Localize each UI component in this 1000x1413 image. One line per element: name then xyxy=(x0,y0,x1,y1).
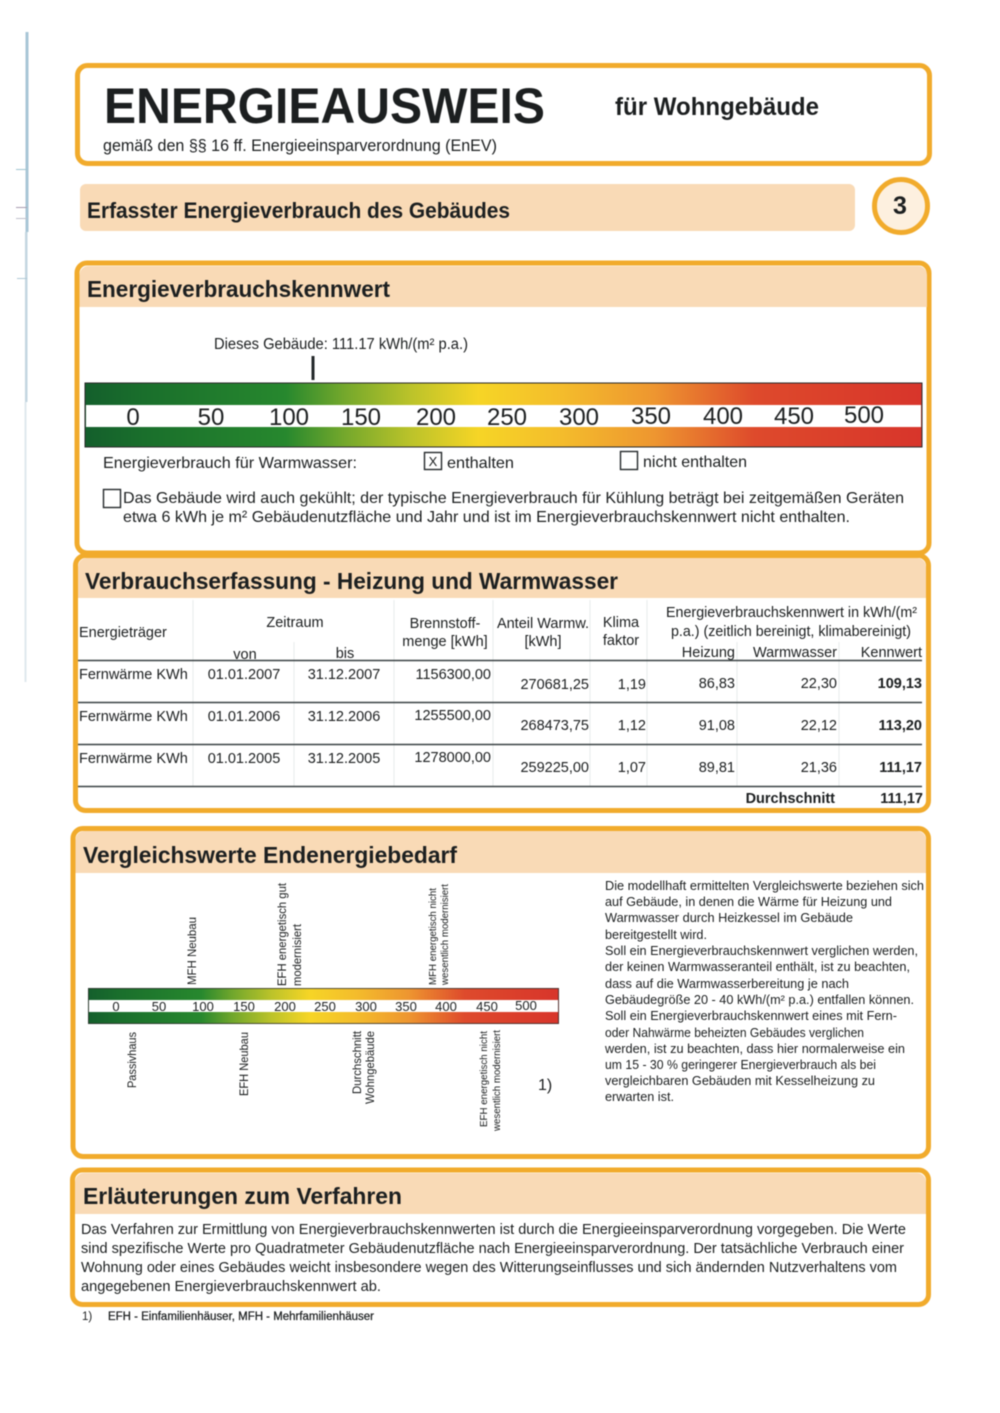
row 2007: 31.12.2007 xyxy=(308,667,380,683)
table header: Warmwasser xyxy=(753,645,837,661)
comparison explanation: Warmwasser durch Heizkessel im Gebäude xyxy=(605,910,853,925)
heading: Energieverbrauchskennwert xyxy=(87,276,390,302)
label: Durchschnitt Wohngebäude xyxy=(350,1030,377,1104)
panel: Energieverbrauchskennwert xyxy=(77,263,929,553)
energy scale: 300 xyxy=(559,404,599,431)
row 2005: 01.01.2005 xyxy=(208,751,280,767)
label: MFH Neubau: MFH Neubau xyxy=(185,917,199,985)
row 2007 xyxy=(79,667,922,693)
row 2006: 01.01.2006 xyxy=(208,709,280,725)
label: EFH nicht modernisiert xyxy=(478,1030,503,1132)
page number badge: 3 xyxy=(893,192,907,220)
heading: Verbrauchserfassung - Heizung und Warmwasser xyxy=(85,568,618,594)
table header: Heizung xyxy=(682,645,735,661)
energy scale: 500 xyxy=(844,402,884,429)
comparison scale: 300 xyxy=(355,999,377,1014)
table header: Klima xyxy=(603,615,640,631)
cooling note xyxy=(104,490,904,526)
comparison scale: 250 xyxy=(314,999,336,1014)
label: Passivhaus: Passivhaus xyxy=(125,1032,139,1088)
energy scale: 350 xyxy=(631,403,671,430)
table header: von xyxy=(233,647,257,663)
row 2005: 1278000,00 xyxy=(414,750,491,766)
label: EFH Neubau: EFH Neubau xyxy=(237,1032,251,1096)
panel: Erläuterungen xyxy=(72,1170,928,1304)
label: MFH nicht modernisiert: MFH energetisch nicht xyxy=(427,888,439,985)
comparison explanation: um 15 - 30 % geringerer Energieverbrauch als bei xyxy=(605,1057,876,1072)
table rules xyxy=(78,660,922,786)
section banner xyxy=(80,184,855,231)
section banner: Erfasster Energieverbrauch des Gebäudes xyxy=(87,198,510,223)
comparison explanation: erwarten ist. xyxy=(605,1089,674,1104)
row 2007: 86,83 xyxy=(699,676,735,692)
table header: Energieträger xyxy=(79,625,167,641)
row 2006: 1255500,00 xyxy=(414,708,491,724)
checkbox: enthalten: X xyxy=(429,454,438,469)
row 2005: 89,81 xyxy=(699,760,735,776)
comparison scale: 0 xyxy=(112,999,120,1014)
energy scale: 0 xyxy=(126,404,140,431)
row 2006: 22,12 xyxy=(801,718,837,734)
footnote: 1) xyxy=(82,1311,92,1323)
average row: Durchschnitt xyxy=(746,791,835,807)
table header: [kWh] xyxy=(524,634,562,650)
heading: Vergleichswerte Endenergiebedarf xyxy=(83,842,457,868)
row 2006: 91,08 xyxy=(699,718,735,734)
checkbox: enthalten xyxy=(424,452,514,472)
comparison explanation: vergleichbaren Gebäuden mit Kesselheizung zu xyxy=(605,1073,875,1088)
table header: bis xyxy=(336,646,354,662)
label: EFH nicht modernisiert: wesentlich modernisiert xyxy=(491,1030,503,1132)
comparison scale: 350 xyxy=(395,999,417,1014)
row 2005: 259225,00 xyxy=(520,760,589,776)
hot water label: Energieverbrauch für Warmwasser: xyxy=(103,455,357,472)
comparison scale: 100 xyxy=(192,999,214,1014)
explanation text: angegebenen Energieverbrauchskennwert ab. xyxy=(81,1278,381,1295)
row 2006: 1,12 xyxy=(618,718,646,734)
comparison scale: 500 xyxy=(515,998,537,1013)
energy scale: 150 xyxy=(341,404,381,431)
table grid xyxy=(193,600,839,786)
row 2005: 111,17 xyxy=(879,760,922,776)
row 2006: 31.12.2006 xyxy=(308,709,380,725)
average row xyxy=(746,791,923,807)
comparison explanation: dass auf die Warmwasserbereitung je nach xyxy=(605,976,849,991)
footnote marker: 1) xyxy=(538,1077,552,1094)
row 2007: 1,19 xyxy=(618,677,646,693)
comparison explanation: der keinen Warmwasseranteil enthält, ist zu beachten, xyxy=(605,959,910,974)
row 2006: 113,20 xyxy=(878,718,922,734)
building value label: Dieses Gebäude: 111.17 kWh/(m² p.a.) xyxy=(214,336,468,353)
row 2007: 22,30 xyxy=(801,676,837,692)
comparison explanation: auf Gebäude, in denen die Wärme für Heizung und xyxy=(605,894,892,909)
table header: Zeitraum xyxy=(266,615,324,631)
label: MFH nicht modernisiert: wesentlich modernisiert xyxy=(439,884,451,986)
row 2006: Fernwärme KWh xyxy=(79,709,188,725)
footnote: EFH - Einfamilienhäuser, MFH - Mehrfamilienhäuser xyxy=(108,1311,374,1323)
table header: menge [kWh] xyxy=(402,634,488,650)
label: Durchschnitt Wohngebäude: Wohngebäude xyxy=(363,1031,377,1104)
title: ENERGIEAUSWEIS xyxy=(104,78,545,134)
row 2005 xyxy=(79,750,922,776)
comparison explanation: Die modellhaft ermittelten Vergleichswerte beziehen sich xyxy=(605,878,924,893)
energy scale: 50 xyxy=(198,404,224,431)
legal basis: gemäß den §§ 16 ff. Energieeinsparverordnung (EnEV) xyxy=(103,136,497,155)
explanation text: Wohnung oder eines Gebäudes weicht insbesondere wegen des Witterungseinflusses und sich ändernden Nutzverhaltens vom xyxy=(81,1259,897,1276)
comparison scale: 50 xyxy=(152,999,166,1014)
label: Durchschnitt Wohngebäude: Durchschnitt xyxy=(350,1030,364,1094)
cooling note: etwa 6 kWh je m² Gebäudenutzfläche und Jahr und ist im Energieverbrauchskennwert nicht enthalten. xyxy=(123,509,850,526)
row 2007: 109,13 xyxy=(878,676,922,692)
cooling note: Das Gebäude wird auch gekühlt; der typische Energieverbrauch für Kühlung beträgt bei zeitgemäßen Geräten xyxy=(123,490,904,507)
consumption table xyxy=(78,600,923,807)
label: EFH gut modernisiert xyxy=(275,882,304,986)
row 2005: 21,36 xyxy=(801,760,837,776)
explanation text: sind spezifische Werte pro Quadratmeter Gebäudenutzfläche nach Energieeinsparverordnung. Der tatsächliche Verbrauch einer xyxy=(81,1240,904,1257)
comparison explanation: oder Nahwärme beheizten Gebäudes verglichen xyxy=(605,1025,864,1040)
label: EFH nicht modernisiert: EFH energetisch nicht xyxy=(478,1031,490,1127)
comparison explanation: Soll ein Energieverbrauchskennwert verglichen werden, xyxy=(605,943,918,958)
row 2007: Fernwärme KWh xyxy=(79,667,188,683)
comparison explanation xyxy=(604,878,924,1104)
row 2007: 1156300,00 xyxy=(415,667,491,683)
table header: faktor xyxy=(603,633,639,649)
comparison explanation: Gebäudegröße 20 - 40 kWh/(m² p.a.) entfallen können. xyxy=(605,992,914,1007)
panel: Vergleichswerte xyxy=(73,828,928,1156)
energy scale: 400 xyxy=(703,403,743,430)
comparison scale: 400 xyxy=(435,999,457,1014)
comparison scale: 450 xyxy=(476,999,498,1014)
table header xyxy=(79,605,922,663)
row 2005: 31.12.2005 xyxy=(308,751,380,767)
row 2007: 270681,25 xyxy=(520,677,589,693)
energy scale: 250 xyxy=(487,404,527,431)
table header: Anteil Warmw. xyxy=(497,616,589,632)
checkbox: enthalten: enthalten xyxy=(447,455,514,472)
panel: Verbrauchserfassung xyxy=(76,556,928,810)
building value marker xyxy=(312,356,314,380)
energy scale: 100 xyxy=(269,404,309,431)
table header: Kennwert xyxy=(861,645,922,661)
label: MFH nicht modernisiert xyxy=(427,884,451,986)
row 2007: 01.01.2007 xyxy=(208,667,280,683)
row 2005: Fernwärme KWh xyxy=(79,751,188,767)
average row: 111,17 xyxy=(880,791,923,807)
scan edge stripe xyxy=(16,32,28,682)
subtitle: building type: für Wohngebäude xyxy=(615,93,819,121)
panel: title xyxy=(78,66,930,164)
energy scale: 450 xyxy=(774,403,814,430)
energy scale xyxy=(85,383,922,447)
comparison explanation: bereitgestellt wird. xyxy=(605,927,707,942)
checkbox: nicht enthalten: nicht enthalten xyxy=(643,454,747,471)
row 2005: 1,07 xyxy=(618,760,646,776)
comparison scale: 200 xyxy=(274,999,296,1014)
energy scale: 200 xyxy=(416,404,456,431)
table header: Brennstoff- xyxy=(410,616,480,632)
label: EFH gut modernisiert: modernisiert xyxy=(290,923,304,986)
comparison explanation: Soll ein Energieverbrauchskennwert eines mit Fern- xyxy=(605,1008,897,1023)
explanation text xyxy=(81,1221,906,1295)
heading: Erläuterungen zum Verfahren xyxy=(83,1183,402,1209)
row 2006 xyxy=(79,708,922,734)
comparison scale: 150 xyxy=(233,999,255,1014)
comparison scale xyxy=(88,988,559,1024)
comparison explanation: werden, ist zu beachten, dass hier normalerweise ein xyxy=(604,1041,905,1056)
page number badge xyxy=(874,180,928,232)
row 2006: 268473,75 xyxy=(520,718,589,734)
table header: p.a.) (zeitlich bereinigt, klimabereinigt) xyxy=(671,624,911,640)
table header: Energieverbrauchskennwert in kWh/(m² xyxy=(666,605,917,621)
label: EFH gut modernisiert: EFH energetisch gut xyxy=(275,882,289,986)
explanation text: Das Verfahren zur Ermittlung von Energieverbrauchskennwerten ist durch die Energieeinsparverordnung vorgegeben. Die Werte xyxy=(81,1221,906,1238)
